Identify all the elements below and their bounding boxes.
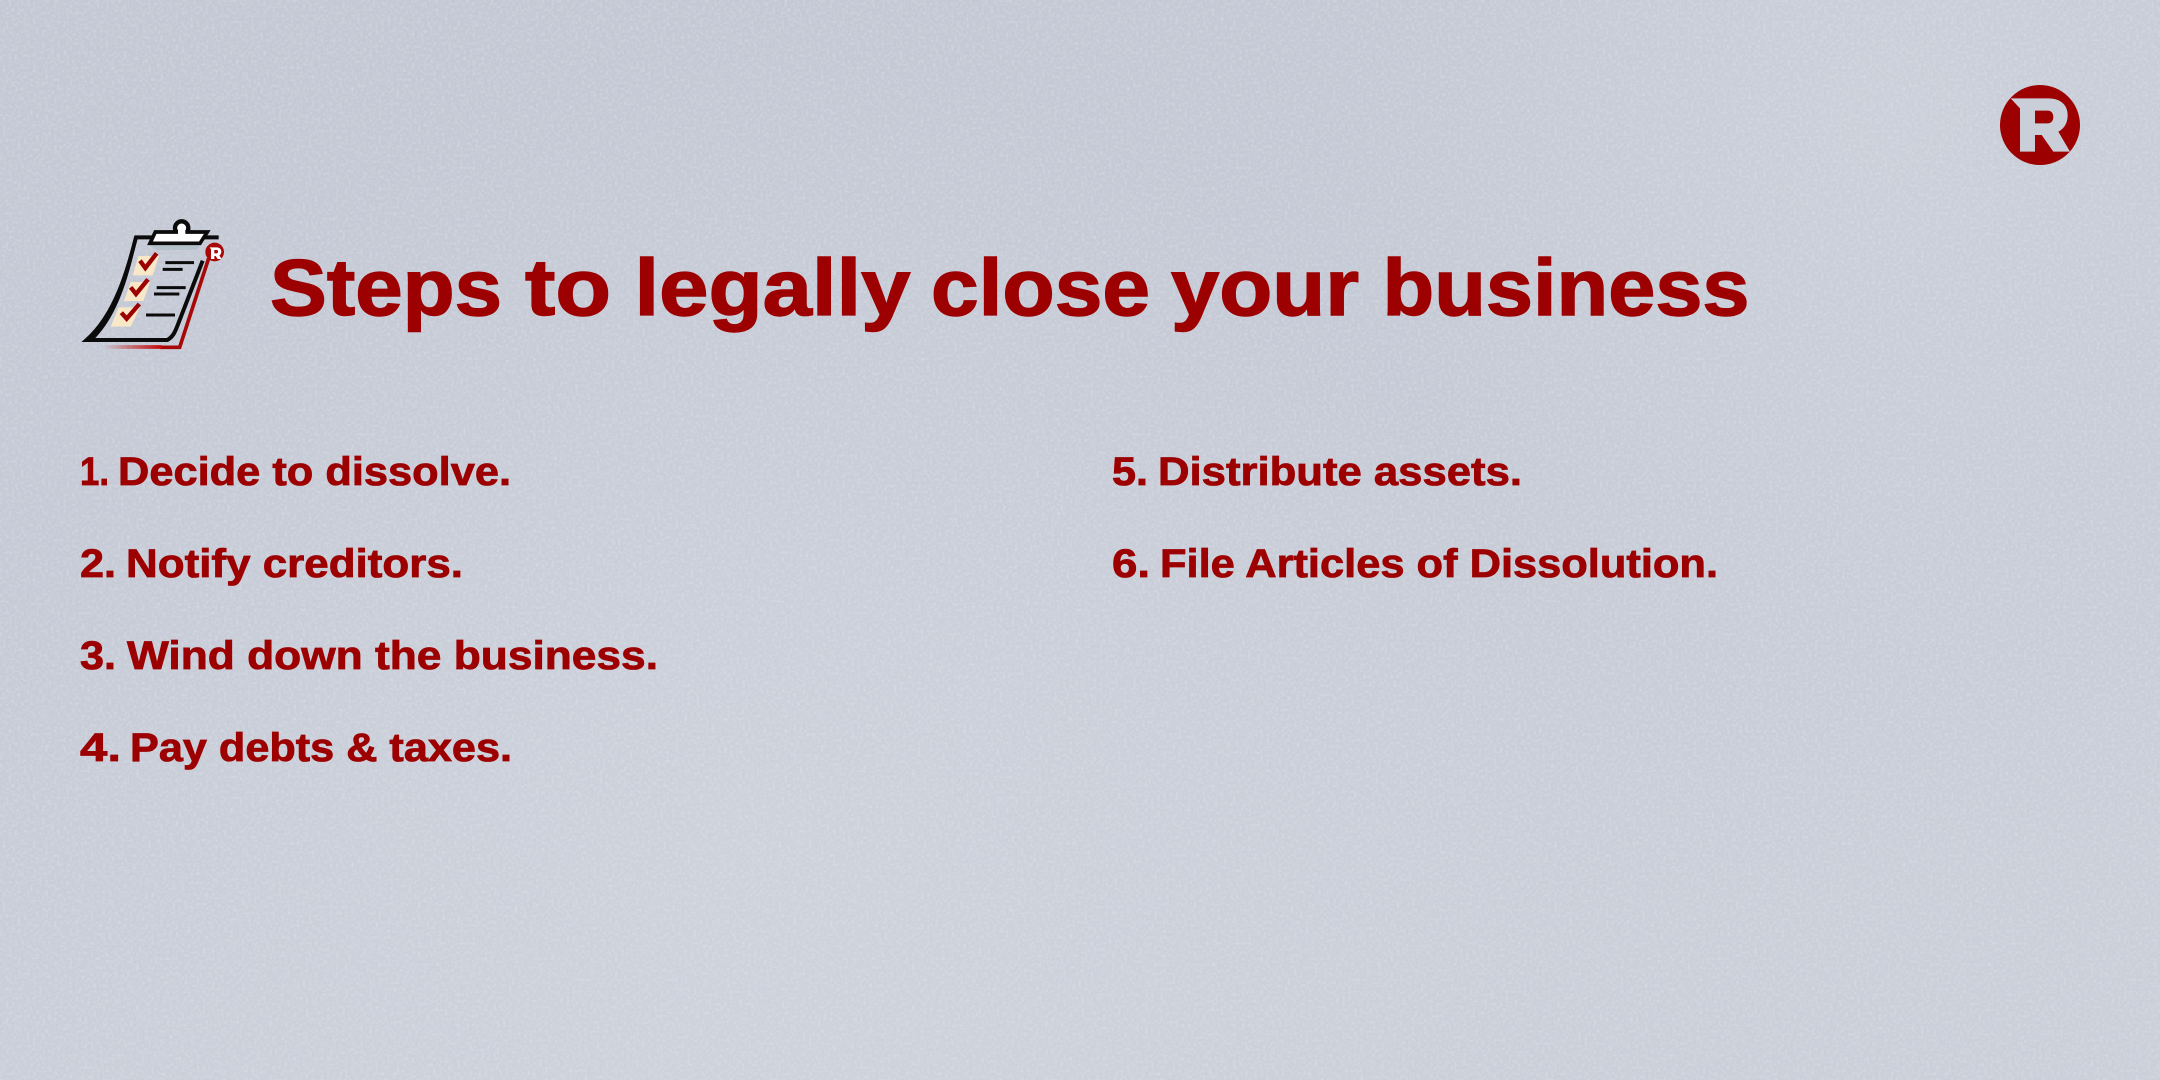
step 3: Wind down the business. xyxy=(127,634,658,678)
logo: R badge xyxy=(2000,85,2080,165)
title: to xyxy=(525,243,611,332)
step 1: 1. xyxy=(80,450,109,494)
title: business xyxy=(1382,243,1750,332)
checkbox 2 xyxy=(124,279,150,301)
step 1: Decide to dissolve. xyxy=(118,450,511,494)
steps: right column xyxy=(1112,450,1718,586)
step 5: 5. xyxy=(1112,450,1148,494)
title: Steps xyxy=(270,243,502,332)
steps: left column xyxy=(80,450,658,770)
step 3: 3. xyxy=(80,634,116,678)
clip shadow xyxy=(150,245,200,250)
title: close xyxy=(931,243,1150,332)
step 6: File Articles of Dissolution. xyxy=(1160,542,1718,586)
icon: clipboard checklist xyxy=(82,221,224,347)
step 4: 4. xyxy=(80,726,121,770)
step 5: Distribute assets. xyxy=(1158,450,1522,494)
clip xyxy=(150,221,207,243)
checkbox 3 xyxy=(111,304,140,327)
title: legally xyxy=(634,243,911,332)
checklist lines xyxy=(146,263,194,315)
step 4: Pay debts & taxes. xyxy=(130,726,512,770)
step 2: Notify creditors. xyxy=(126,542,463,586)
title: your xyxy=(1171,243,1359,332)
checkbox 1 xyxy=(133,253,159,275)
step 2: 2. xyxy=(80,542,116,586)
step 6: 6. xyxy=(1112,542,1150,586)
R seal xyxy=(205,243,224,261)
clipboard sheet xyxy=(87,237,219,340)
red shadow edge xyxy=(160,258,209,347)
